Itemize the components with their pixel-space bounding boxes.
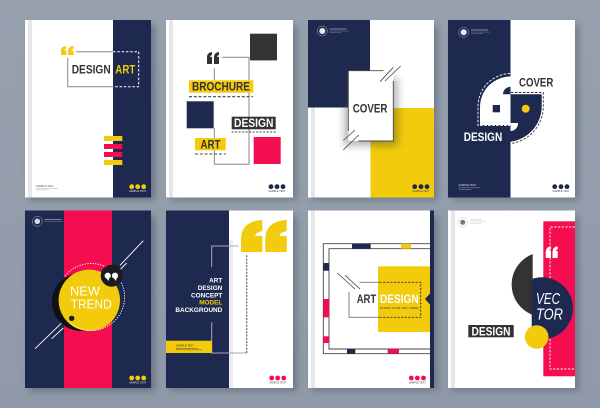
label: design: DESIGN [472, 325, 510, 338]
dots and caption: SAMPLE TEXT [129, 382, 147, 384]
icon: large yellow quotes [241, 220, 287, 252]
heading: new trend: NEW [70, 284, 101, 299]
inner card shadow [344, 78, 398, 146]
navy square [493, 105, 500, 112]
yellow circle [525, 325, 548, 349]
label: art: ART [200, 138, 220, 151]
icon: white quote [546, 246, 558, 258]
dots and caption: SAMPLE TEXT [268, 190, 286, 193]
yellow dot [522, 105, 530, 113]
text stack: BACKGROUND [175, 307, 223, 314]
logo [317, 26, 348, 36]
heading: new trend [70, 284, 112, 311]
heading: design art [72, 63, 135, 76]
heading: design art: DESIGN [72, 63, 111, 76]
dots and caption [269, 376, 287, 384]
dark small dot [69, 316, 74, 321]
pink square [254, 137, 281, 164]
heading: art design: ART [357, 293, 376, 306]
dots and caption: SAMPLE TEXT [269, 382, 287, 384]
shadow on page edge [229, 240, 233, 388]
sample text left: SAMPLE TEXT [36, 184, 54, 188]
diagonal lines [35, 241, 143, 349]
white quote shape [480, 76, 510, 125]
heading: art design [357, 293, 419, 306]
inner white card [348, 71, 393, 141]
panel: cover 4 cover design [448, 20, 579, 200]
dashed ring [65, 263, 125, 330]
label: art [195, 138, 226, 154]
icon: quote circle [101, 265, 123, 287]
navy circle [532, 277, 573, 339]
dark circle behind [52, 273, 110, 331]
sample text left: SAMPLE TEXT [458, 183, 477, 187]
navy square [187, 101, 214, 128]
logo [459, 27, 490, 37]
dots and caption: SAMPLE TEXT [129, 190, 147, 193]
heading: design: DESIGN [464, 131, 502, 144]
diagonal accents [337, 273, 360, 289]
yellow sample band: SAMPLE TEXT [176, 344, 194, 348]
frame lines [349, 282, 421, 317]
dots and caption: SAMPLE TEXT [409, 382, 426, 384]
logo [32, 216, 64, 226]
connector lines [214, 57, 249, 164]
dots and caption: SAMPLE TEXT [552, 190, 570, 193]
tagline: PLACE YOUR TEXT HERE [380, 306, 418, 310]
label: brochure: BROCHURE [192, 81, 250, 94]
icon: dark quote [207, 52, 219, 64]
dashed outline [478, 74, 543, 144]
panel: cover 1 design art [25, 20, 155, 200]
panel: cover 2 brochure [166, 20, 297, 200]
heading: vector: VEC [536, 291, 561, 308]
frame blocks [323, 244, 411, 354]
heading: vector [536, 291, 563, 324]
dots and caption [412, 184, 430, 193]
text stack: MODEL [199, 300, 222, 307]
dots and caption: SAMPLE TEXT [412, 190, 430, 193]
heading: design art: ART [115, 63, 135, 76]
panel: cover 7 art design frame [308, 210, 438, 391]
striped bars [104, 136, 122, 165]
yellow block [378, 266, 430, 332]
heading: cover: COVER [519, 77, 554, 90]
yellow sample band [166, 341, 212, 353]
navy pointer [425, 294, 430, 304]
heading: new trend: TREND [71, 296, 112, 311]
dots and caption [129, 376, 147, 384]
dashed line [550, 227, 575, 369]
text stack [175, 278, 223, 314]
inner card outline [348, 71, 393, 141]
frame lines [68, 52, 139, 87]
dark square [250, 34, 277, 60]
diagonal accents [343, 66, 401, 150]
frame lines [212, 246, 247, 353]
navy quote shape [510, 94, 542, 142]
notches [503, 87, 518, 131]
dots and caption [409, 376, 426, 384]
text stack: DESIGN [198, 285, 223, 292]
text stack: CONCEPT [191, 292, 222, 299]
pink panel [543, 221, 575, 376]
dots and caption [129, 184, 147, 193]
dots and caption [268, 184, 286, 193]
logo [458, 218, 486, 227]
double frame [323, 244, 430, 354]
sample text left [36, 184, 58, 190]
label: design: DESIGN [234, 117, 274, 130]
panel: cover 3 cover [308, 20, 438, 200]
text stack: ART [209, 278, 222, 285]
dark half circle [512, 254, 533, 315]
icon: yellow quote [61, 46, 74, 55]
dots and caption [552, 184, 570, 193]
heading: cover: COVER [353, 102, 388, 115]
panel: cover 5 new trend [25, 210, 155, 391]
heading: vector: TOR [536, 307, 563, 324]
heading: art design: DESIGN [380, 293, 419, 306]
panel: cover 6 art design concept [166, 210, 297, 391]
yellow circle [59, 270, 120, 331]
panel: cover 8 vector [448, 210, 579, 391]
sample text left [458, 183, 480, 190]
